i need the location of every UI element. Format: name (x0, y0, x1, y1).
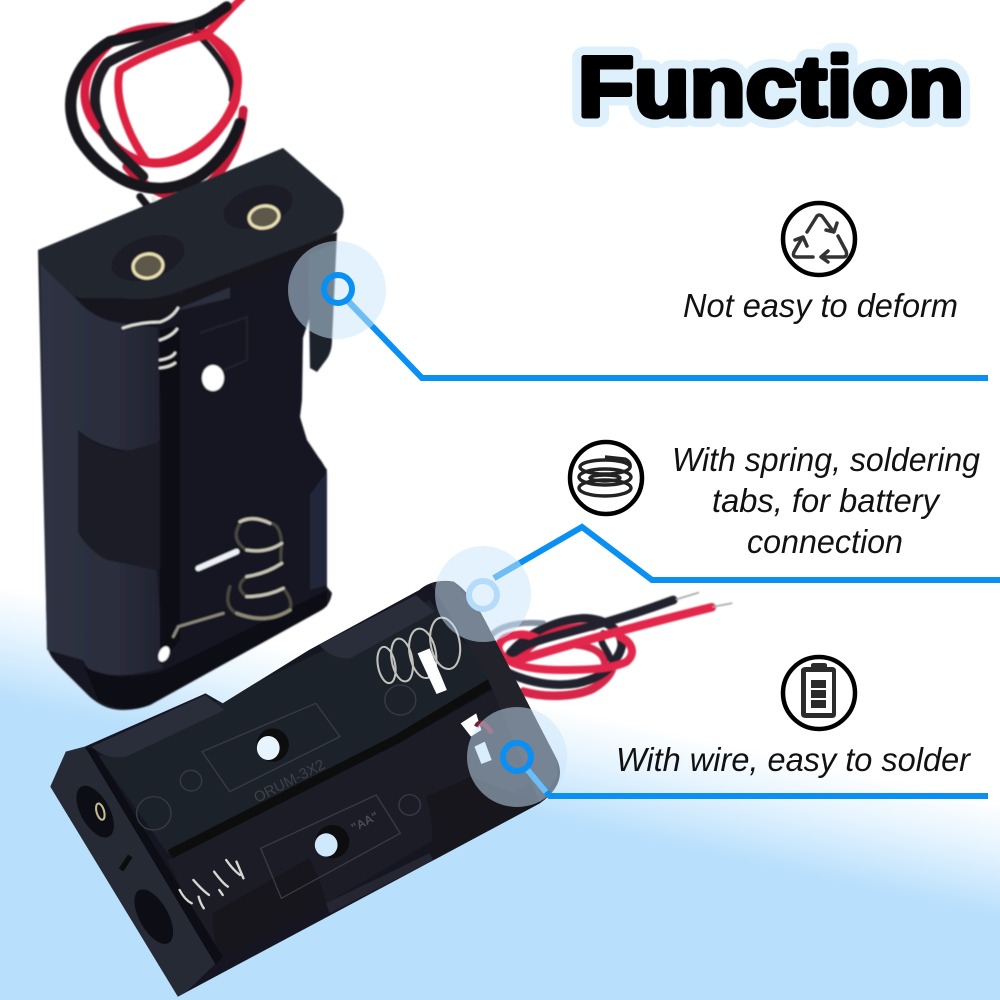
label: with wire: With wire, easy to solder (616, 741, 972, 778)
upper right spring (375, 615, 464, 684)
title: Function (578, 40, 964, 135)
photo: lower battery holder (40, 570, 578, 1000)
callout: spring and tabs (435, 527, 1000, 642)
bottom rim (84, 590, 327, 709)
screw recesses (218, 177, 298, 237)
callout ring (503, 743, 531, 771)
contact cut-outs (418, 648, 447, 694)
rivets (247, 204, 281, 230)
upper mounting hole (257, 728, 289, 762)
callout ring (469, 581, 497, 609)
bottom flap left (212, 858, 326, 962)
icon: recycle (783, 203, 855, 275)
upper flaps (92, 695, 224, 757)
callout leader line (494, 527, 1000, 580)
flap recess (78, 432, 160, 570)
upper spring (123, 308, 178, 368)
lower left spring (180, 860, 243, 908)
left end cap (50, 747, 219, 1000)
callout halo (288, 241, 386, 339)
embossed text ORUM-3X2: ORUM-3X2 (251, 756, 328, 807)
icon: battery (783, 657, 855, 729)
label: not easy to deform: Not easy to deform (683, 287, 958, 324)
photo: lower battery holder wires (490, 593, 732, 696)
battery holder cap (38, 148, 344, 299)
bottom lower wall (326, 853, 433, 913)
side tab (308, 233, 337, 372)
slot under cap (180, 285, 230, 310)
lower tray floor (174, 736, 411, 944)
label: spring and soldering tabs: connection (747, 523, 903, 560)
embossed box (200, 317, 247, 378)
wall highlight (310, 472, 327, 590)
callout halo (467, 707, 567, 807)
label: spring and soldering tabs (672, 441, 981, 560)
callout leader line (526, 768, 988, 796)
wires: upper holder loop (71, 0, 243, 213)
right end cap (430, 582, 557, 803)
callout halo (435, 546, 531, 642)
callout: wire (467, 707, 988, 807)
center wall (180, 280, 327, 640)
icon: spring (570, 442, 642, 514)
holder body (40, 570, 578, 1000)
callout: not easy to deform (288, 241, 988, 378)
left battery flaps (40, 262, 163, 675)
mounting hole upper (202, 365, 224, 391)
notch (156, 645, 172, 663)
label: spring and soldering tabs: With spring, soldering (672, 441, 981, 478)
tray divider (168, 675, 500, 858)
embossed labels (137, 685, 420, 898)
title: Function (578, 40, 964, 135)
lower mounting hole (315, 825, 349, 858)
left cap sockets (69, 780, 122, 843)
lower spring (173, 519, 291, 637)
embossed text AA: "AA" (349, 809, 381, 835)
bottom flap right (426, 777, 540, 863)
photo: upper battery holder (38, 0, 344, 710)
label: spring and soldering tabs: tabs, for battery (712, 482, 941, 519)
holder body (38, 233, 337, 710)
callout ring (324, 275, 352, 303)
callout leader line (347, 300, 988, 378)
upper tray floor (99, 600, 499, 853)
channel (160, 325, 180, 665)
